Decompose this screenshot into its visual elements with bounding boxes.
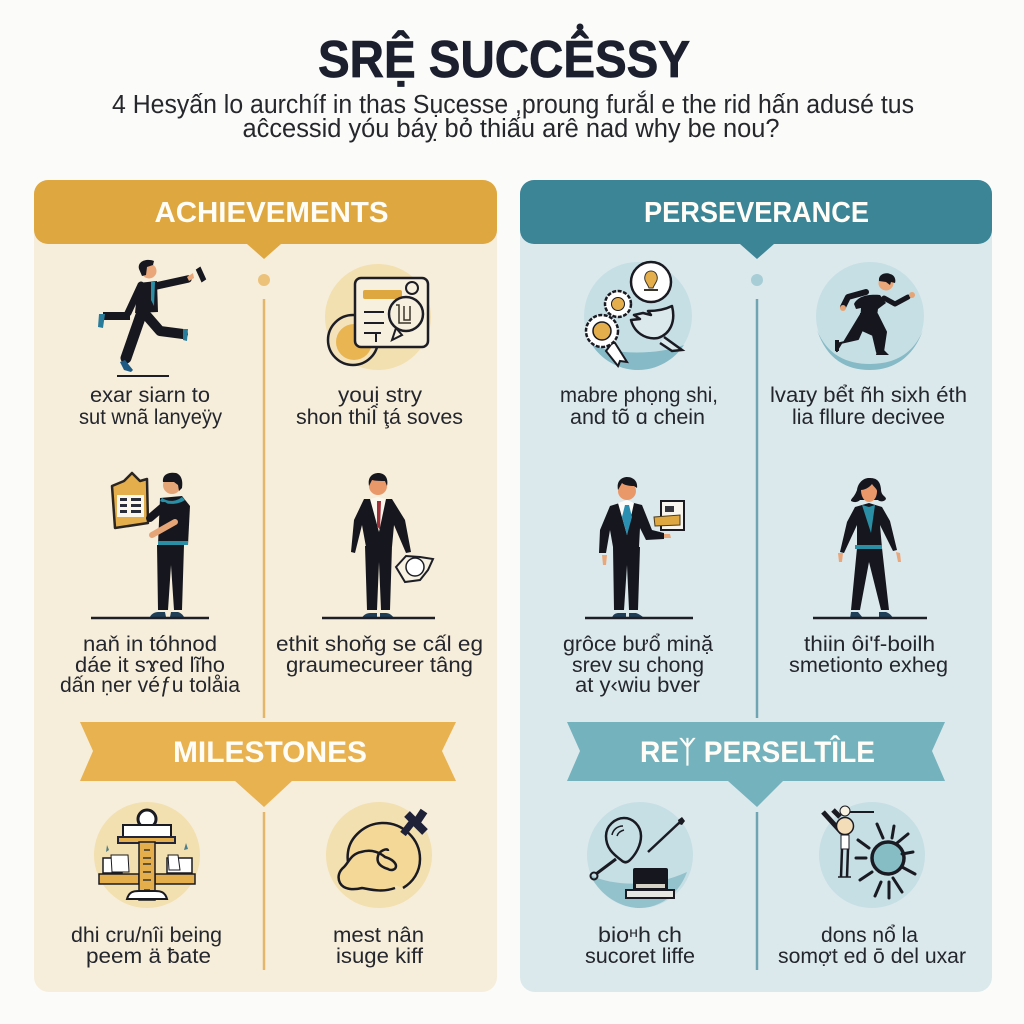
banner: milestones: MILESTONES xyxy=(173,736,367,769)
label: woman in suit xyxy=(789,632,948,677)
banner: milestones xyxy=(80,722,456,807)
label: award podium: peem ä ƀate xyxy=(86,944,211,968)
subtitle: aĉcessid yóu báỵ bỏ thiấu arê nad why be nou? xyxy=(242,115,780,143)
icon: man in suit with helmet xyxy=(322,473,435,618)
label: certificate and coin xyxy=(296,383,463,429)
banner: rey perseltile: REᛉ PERSELTÎLE xyxy=(640,735,875,769)
label: running person xyxy=(770,383,967,429)
label: abstract figure with cross xyxy=(333,923,424,968)
icon: woman in suit xyxy=(813,478,927,618)
icon: award podium xyxy=(94,802,200,908)
label: rosettes and badge: and tõ ɑ chein xyxy=(570,405,705,429)
label: man holding scoreboard: dấn ṇer véƒu tolåia xyxy=(60,673,240,697)
label: running person: lia fllure decivee xyxy=(792,405,945,429)
label: magnifier and laptop: bioᵸh ch xyxy=(598,923,682,947)
icon: man in suit with document xyxy=(585,477,693,618)
label: man in suit with document: srev su chong xyxy=(572,653,704,677)
icon: sun and figure xyxy=(819,802,925,908)
label: magnifier and laptop xyxy=(585,923,695,968)
label: man holding scoreboard: naň in tóhnod xyxy=(83,632,217,656)
label: abstract figure with cross: mest nân xyxy=(333,923,424,947)
label: man in suit with helmet xyxy=(276,632,483,677)
label: man in suit with helmet: ethit shoňg se cấl eg xyxy=(276,632,483,656)
label: man in suit with document: grôce bưổ minặ xyxy=(563,632,713,656)
label: man in suit with helmet: graumecureer tâng xyxy=(286,653,473,677)
label: sun and figure xyxy=(778,923,966,968)
banner: rey perseltile xyxy=(567,722,945,807)
label: woman in suit: smetionto exheg xyxy=(789,653,948,677)
label: running businessman: sut ᴡnã lanyeÿy xyxy=(79,405,222,429)
label: running businessman: exar siarn to xyxy=(90,383,210,407)
label: rosettes and badge: mabre phọng shi, xyxy=(560,383,718,407)
label: abstract figure with cross: isuge kiff xyxy=(336,944,423,968)
subtitle: 4 Hesyấn lo aurchíf in thas Sụcesse ,proung furắl e the rid hấn adusé tus xyxy=(112,90,914,119)
title: SRỆ SUCCÊSSY xyxy=(318,30,690,89)
label: certificate and coin: youị stry xyxy=(338,383,422,407)
label: man in suit with document: at y‹wiu bver xyxy=(575,673,700,697)
icon: rosettes and badge xyxy=(584,262,692,370)
label: woman in suit: thiin ôi'f-boilh xyxy=(804,632,935,656)
label: man holding scoreboard: dáe it sɤed lĩho xyxy=(75,653,225,677)
subtitle xyxy=(112,90,914,143)
label: running person: lvaɪy bểt ñh sixh éth xyxy=(770,383,967,407)
header: achievements xyxy=(34,180,497,259)
icon: running businessman xyxy=(98,260,205,376)
panel: perseverance xyxy=(520,180,992,992)
label: certificate and coin: shon thiÎ ţá soves xyxy=(296,404,463,429)
label: sun and figure: somợt ed ō del uxar xyxy=(778,944,966,968)
label: magnifier and laptop: sucoret liffe xyxy=(585,944,695,968)
label: rosettes and badge xyxy=(560,383,718,429)
header: achievements: ACHIEVEMENTS xyxy=(154,197,388,229)
label: man in suit with document xyxy=(563,632,713,697)
column divider: perseverance xyxy=(751,274,763,970)
icon: running person xyxy=(816,262,924,370)
label: running businessman xyxy=(79,383,222,429)
header: perseverance xyxy=(520,180,992,259)
panel: achievements xyxy=(34,180,497,992)
icon: abstract figure with cross xyxy=(326,802,432,908)
icon: man holding scoreboard xyxy=(91,473,209,618)
icon: certificate and coin xyxy=(325,264,431,370)
label: award podium xyxy=(71,923,222,968)
label: man holding scoreboard xyxy=(60,632,240,697)
label: sun and figure: dons nổ la xyxy=(821,923,918,947)
header: perseverance: PERSEVERANCE xyxy=(644,197,869,229)
icon: magnifier and laptop xyxy=(587,802,693,908)
column divider: achievements xyxy=(258,274,270,970)
label: award podium: dhi cru/nîi being xyxy=(71,923,222,947)
